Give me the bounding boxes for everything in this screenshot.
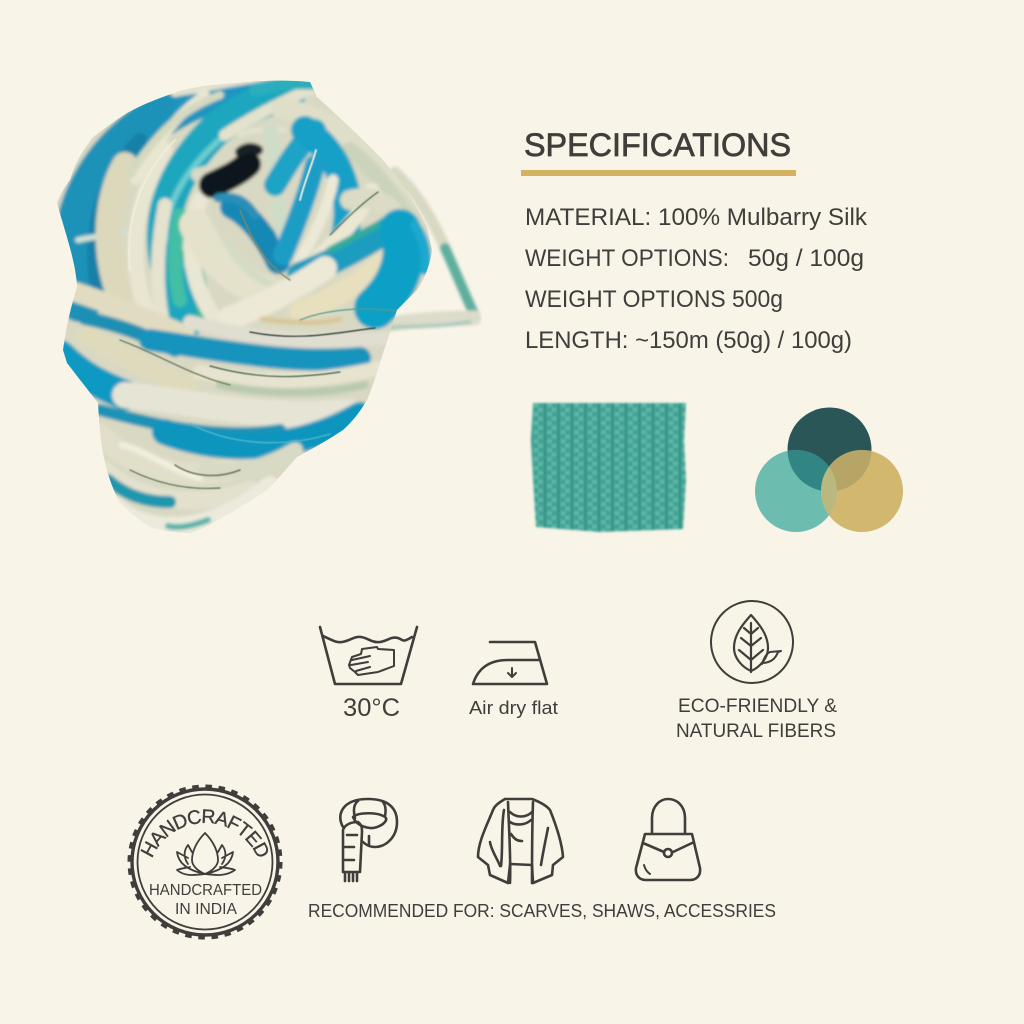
centre	[195, 225, 268, 292]
colour palette circles	[755, 408, 903, 532]
photo: silk yarn ball	[40, 70, 475, 540]
specification list	[525, 204, 868, 354]
icon: handbag	[636, 799, 700, 880]
text: recommended uses: RECOMMENDED FOR: SCARVES, SHAWS, ACCESSRIES	[308, 901, 776, 921]
knit swatch	[531, 403, 686, 532]
icon: iron, air dry flat: Air dry flat	[469, 697, 558, 718]
stamp: handcrafted in India: IN INDIA	[175, 901, 238, 918]
icon: hand	[349, 647, 394, 675]
stamp: handcrafted in India: HANDCRAFTED	[149, 882, 262, 899]
stamp: handcrafted in India	[128, 784, 282, 940]
icon: wash at 30 degrees: 30°C	[343, 694, 400, 722]
icon: lotus	[177, 833, 235, 875]
icon: wash at 30 degrees	[320, 627, 417, 722]
cream strand left	[108, 165, 128, 315]
top ribbon	[225, 85, 320, 135]
icon: shawl	[478, 799, 563, 883]
icon: eco-friendly leaf	[676, 601, 837, 742]
upper left blue	[75, 95, 200, 300]
specification list: WEIGHT OPTIONS:	[525, 245, 729, 272]
yarn loop ribbon	[340, 172, 475, 335]
text: eco-friendly: ECO-FRIENDLY &	[678, 695, 837, 717]
icon: scarf	[340, 799, 397, 881]
specification list: 50g / 100g	[748, 245, 864, 272]
text: eco-friendly	[676, 695, 837, 742]
specification list: WEIGHT OPTIONS 500g	[525, 286, 783, 313]
specification list: LENGTH: ~150m (50g) / 100g)	[525, 327, 852, 354]
right blue group	[270, 130, 290, 250]
hole	[188, 162, 208, 184]
yarn main body	[57, 80, 432, 533]
text: eco-friendly: NATURAL FIBERS	[676, 720, 836, 742]
main teal strand	[164, 92, 290, 320]
stamp: handcrafted in India: HANDCRAFTED	[140, 809, 268, 858]
icon: iron, air dry flat	[469, 642, 558, 718]
lower bands	[75, 292, 185, 335]
heading: specifications: SPECIFICATIONS	[524, 127, 791, 163]
specification list: MATERIAL: 100% Mulbarry Silk	[525, 204, 868, 231]
yarn fine creases	[129, 140, 175, 270]
